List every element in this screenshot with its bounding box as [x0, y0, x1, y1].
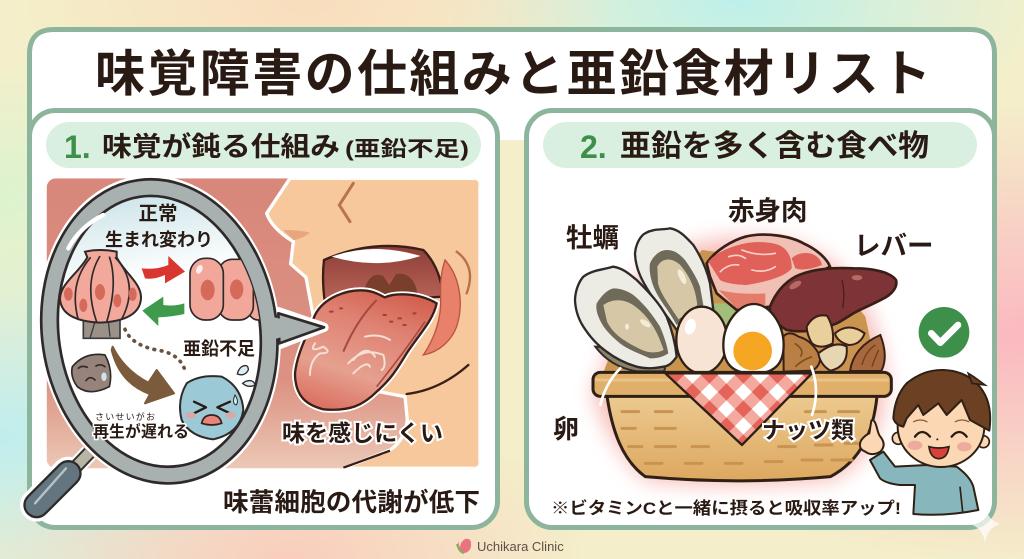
magnifying glass — [18, 159, 324, 505]
label: zinc deficiency: 亜鉛不足 — [183, 339, 255, 359]
oyster front — [575, 267, 677, 371]
face — [267, 178, 480, 468]
label: egg: 卵 — [553, 414, 579, 444]
title panel — [29, 29, 995, 150]
check mark badge — [919, 307, 969, 358]
egg halved — [723, 304, 784, 374]
label: hard to taste: 味を感じにくい — [282, 420, 443, 446]
label: liver: レバー — [854, 231, 934, 261]
heading text: 味覚が鈍る仕組み — [102, 131, 340, 162]
heading number: 2. — [580, 129, 607, 165]
sparkle — [970, 505, 1000, 543]
label: turnover: 生まれ変わり — [105, 230, 213, 250]
handle — [35, 453, 89, 505]
red background — [47, 178, 480, 468]
mouth — [323, 246, 443, 303]
label: nuts: ナッツ類 — [762, 417, 854, 443]
vitamin C note: ※ビタミンCと一緒に摂ると吸収率アップ! — [551, 498, 901, 518]
sad old cell — [72, 354, 111, 392]
logo icon — [457, 539, 471, 553]
heading text: 亜鉛を多く含む食べ物 — [620, 130, 929, 163]
shirt — [870, 452, 978, 515]
panel heading pill — [543, 122, 977, 168]
taste bud — [60, 250, 141, 338]
panel heading pill — [46, 122, 481, 168]
jaw line — [407, 365, 468, 394]
label: slower regeneration: 再生が遅れる — [93, 422, 189, 441]
basket back — [604, 250, 877, 372]
nuts — [783, 315, 885, 372]
title: 味覚障害の仕組みと亜鉛食材リスト — [95, 46, 931, 102]
label: oysters: 牡蠣 — [566, 223, 619, 253]
arrow: renewal green — [142, 297, 184, 326]
oyster back — [635, 228, 713, 330]
label: red meat: 赤身肉 — [728, 196, 808, 226]
arrow: brown decline — [112, 347, 174, 403]
heading note: (亜鉛不足) — [345, 138, 469, 161]
panel: zinc foods — [526, 110, 1000, 543]
tongue coating — [310, 336, 390, 375]
ears — [892, 432, 904, 444]
teeth — [332, 249, 421, 263]
crying cell — [180, 366, 255, 439]
caption: metabolism: 味蕾細胞の代謝が低下 — [223, 488, 480, 517]
arrow: renewal red — [142, 256, 185, 283]
label: normal: 正常 — [138, 203, 178, 225]
liver — [770, 268, 896, 331]
hair — [893, 370, 990, 431]
red glow — [592, 238, 885, 485]
meat — [707, 235, 830, 310]
normal cells — [189, 258, 260, 321]
dotted link — [125, 329, 186, 374]
tongue — [295, 290, 437, 410]
panel: taste mechanism — [18, 110, 498, 528]
uvula — [363, 274, 417, 295]
checkered napkin — [665, 373, 812, 445]
lens ring and callout tail — [18, 159, 324, 503]
face — [898, 386, 984, 467]
heading number: 1. — [64, 129, 91, 165]
nose mark — [339, 183, 353, 222]
egg whole — [676, 307, 727, 373]
tongue spots — [330, 308, 416, 325]
hand — [860, 420, 884, 454]
leader lines — [600, 367, 816, 415]
basket body — [593, 372, 891, 481]
face details — [915, 432, 967, 437]
logo text: Uchikara Clinic — [477, 539, 564, 554]
illustration: face and tongue — [47, 178, 480, 468]
label: ruby reading: さいせいがお — [95, 411, 155, 422]
boy character — [860, 370, 990, 515]
food basket — [575, 228, 990, 515]
cowlick — [968, 373, 985, 385]
lip — [423, 260, 460, 355]
footer logo — [457, 539, 564, 554]
